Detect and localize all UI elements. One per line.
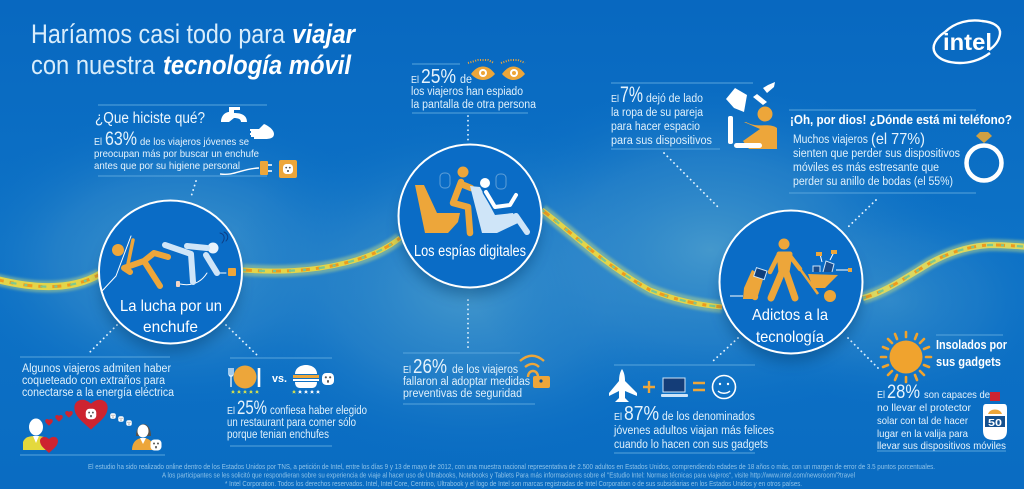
panel: security <box>403 353 550 404</box>
heading: que hiciste: ¿Que hiciste qué? <box>95 110 205 127</box>
text: 26 percent: de los viajeros <box>452 364 518 376</box>
text: flirting: conectarse a la energía eléctrica <box>22 387 175 399</box>
title: Haríamos casi todo para <box>31 19 285 49</box>
panel: 7 percent <box>611 82 777 149</box>
circle shadows <box>100 160 861 362</box>
text: 28 percent: no llevar el protector <box>877 402 971 414</box>
text: 7 percent: El <box>611 93 619 105</box>
text: 77 percent: sienten que perder sus dispositivos <box>793 148 960 160</box>
icon: eyes <box>468 60 525 80</box>
text: 7 percent: para sus dispositivos <box>611 135 712 147</box>
text: 25 percent spying: El <box>411 74 419 86</box>
icon: kicking light figure <box>165 232 236 287</box>
icon: wifi lock <box>520 356 550 388</box>
intel logo <box>934 20 1000 63</box>
text: flirting: Algunos viajeros admiten haber <box>22 363 171 375</box>
text: 25 percent restaurant <box>227 398 367 441</box>
text: 77 percent <box>793 131 960 188</box>
title: con nuestra <box>31 50 155 80</box>
text: 63 percent: 63% <box>105 129 137 150</box>
footer note: A los participantes se les solicitó que respondieran sobre su experiencia de viaje al hacer uso de Ultrabooks, Notebooks y Tablets Para más informaciones sobre el "Estudio Intel: Normas técnicas para viajeros", visite http://www.intel.com/newsroom/?travel <box>162 470 855 480</box>
heading: Adictos: Adictos a la <box>752 307 828 324</box>
text: 25 percent restaurant: confiesa haber elegido <box>270 405 367 417</box>
icon: burger stars <box>292 390 320 394</box>
text: 87 percent: de los denominados <box>662 411 755 423</box>
icon: falling orange figure <box>102 236 168 291</box>
text: 26 percent: El <box>403 364 411 376</box>
text: 28 percent: llevar sus dispositivos móviles <box>877 440 1006 452</box>
panel: hygiene <box>94 105 297 178</box>
footer note <box>88 462 935 488</box>
text: flirting <box>22 363 175 399</box>
text: 26 percent: fallaron al adoptar medidas <box>403 376 530 388</box>
icon: suitcase <box>730 268 767 300</box>
text: 87 percent: 87% <box>624 403 659 425</box>
icon: hand <box>250 124 274 139</box>
title: tecnología móvil <box>163 50 352 80</box>
panel: Adictos a la tecnología <box>720 210 862 354</box>
icon: man with heart <box>23 418 58 453</box>
panel: Adictos a la tecnología: tecnología <box>756 329 824 346</box>
icon: plate and cutlery <box>229 366 259 388</box>
text: 77 percent: móviles es más estresante que <box>793 162 939 174</box>
icon: plus, laptop, equals, smiley <box>643 376 736 398</box>
heading: Los espías digitales: Los espías digitales <box>414 243 526 260</box>
glowing ribbon <box>0 210 1024 307</box>
panel: restaurant <box>227 358 367 446</box>
icon: plug and socket <box>220 160 297 178</box>
icon: plane <box>609 369 637 402</box>
text: 25 percent restaurant: un restaurant para comer sólo <box>227 417 356 429</box>
text: 28 percent: El <box>877 389 885 401</box>
text: 7 percent: 7% <box>620 82 643 107</box>
text: 28 percent: son capaces de <box>924 389 990 401</box>
icon: sun <box>881 332 931 382</box>
heading: La lucha: La lucha por un <box>120 298 222 315</box>
icon: walking figure <box>770 238 800 298</box>
text: 26 percent <box>403 356 530 400</box>
text: 63 percent <box>94 129 259 172</box>
text: 7 percent: dejó de lado <box>646 93 703 105</box>
icon: light seat and traveller <box>470 178 527 233</box>
panel: sunscreen <box>877 332 1007 452</box>
icon: burger and socket <box>293 365 334 388</box>
icon: wheelbarrow <box>800 250 852 302</box>
text: 7 percent: la ropa de su pareja <box>611 107 704 119</box>
icon: faucet <box>221 107 247 122</box>
text: 87 percent: jóvenes adultos viajan más felices <box>613 425 774 437</box>
icon: woman with socket <box>132 424 162 450</box>
text: 25 percent spying: la pantalla de otra persona <box>411 99 537 111</box>
title <box>31 19 357 80</box>
panel: sunscreen: sus gadgets <box>936 355 1001 369</box>
text: 26 percent: preventivas de seguridad <box>403 388 522 400</box>
text: 25 percent spying: los viajeros han espiado <box>411 86 523 98</box>
panel: La lucha por un enchufe <box>99 200 242 344</box>
text: 28 percent: 28% <box>887 382 920 403</box>
icon: stars <box>231 390 259 394</box>
icon: plane windows <box>440 173 506 189</box>
text: 25 percent spying: 25% <box>421 66 456 88</box>
dotted connectors <box>89 116 880 370</box>
text: 87 percent: cuando lo hacen con sus gadgets <box>614 439 768 451</box>
text: 25 percent spying <box>411 66 537 111</box>
text: 77 percent: Muchos viajeros <box>793 134 868 146</box>
icon: hearts and sockets <box>45 400 132 430</box>
icon: ring <box>966 132 1002 180</box>
text: 63 percent: antes que por su higiene personal <box>94 160 240 172</box>
heading: Insolados: Insolados por <box>936 338 1007 352</box>
text: 7 percent: para hacer espacio <box>611 121 700 133</box>
text: flirting: coqueteado con extraños para <box>22 375 166 387</box>
text: 63 percent: El <box>94 136 102 148</box>
intel logo: intel <box>943 29 992 55</box>
text: 25 percent restaurant: porque tenian enchufes <box>227 429 329 441</box>
text: 25 percent restaurant: 25% <box>237 398 267 419</box>
vs label: vs. <box>272 373 287 385</box>
text: 28 percent <box>877 382 1006 452</box>
panel: flirting <box>20 357 175 455</box>
text: 25 percent restaurant: El <box>227 405 235 417</box>
icon: person packing <box>726 82 777 149</box>
panel: 87 percent <box>609 365 774 453</box>
panel: lost phone <box>789 110 1012 193</box>
icon: orange seat and spy <box>415 166 471 233</box>
text: 26 percent: 26% <box>413 356 447 378</box>
text: 25 percent spying: de <box>460 74 472 86</box>
text: 7 percent <box>611 82 712 147</box>
panel: Los espías digitales <box>398 144 542 288</box>
text: 77 percent: (el 77%) <box>871 131 925 148</box>
text: 87 percent: El <box>614 411 622 423</box>
text: 63 percent: preocupan más por buscar un enchufe <box>94 148 259 160</box>
footer note: * Intel Corporation. Todos los derechos reservados. Intel, Intel Core, Centrino, Ultrabook y el logo de Intel son marcas registradas de Intel Corporation o de sus subsidiarias en los Estados Unidos y en otros países. <box>225 479 802 488</box>
panel: La lucha por un enchufe: enchufe <box>143 319 198 336</box>
text: 63 percent: de los viajeros jóvenes se <box>140 136 249 148</box>
text: 28 percent: solar con tal de hacer <box>877 415 968 427</box>
text: 77 percent: perder su anillo de bodas (el 55%) <box>793 176 953 188</box>
panel: spying <box>411 60 537 113</box>
title: viajar <box>292 19 357 49</box>
text: 87 percent <box>613 403 774 451</box>
text: 28 percent: lugar en la valija para <box>877 428 968 440</box>
icon: sunscreen bottle: 50 <box>988 417 1002 429</box>
